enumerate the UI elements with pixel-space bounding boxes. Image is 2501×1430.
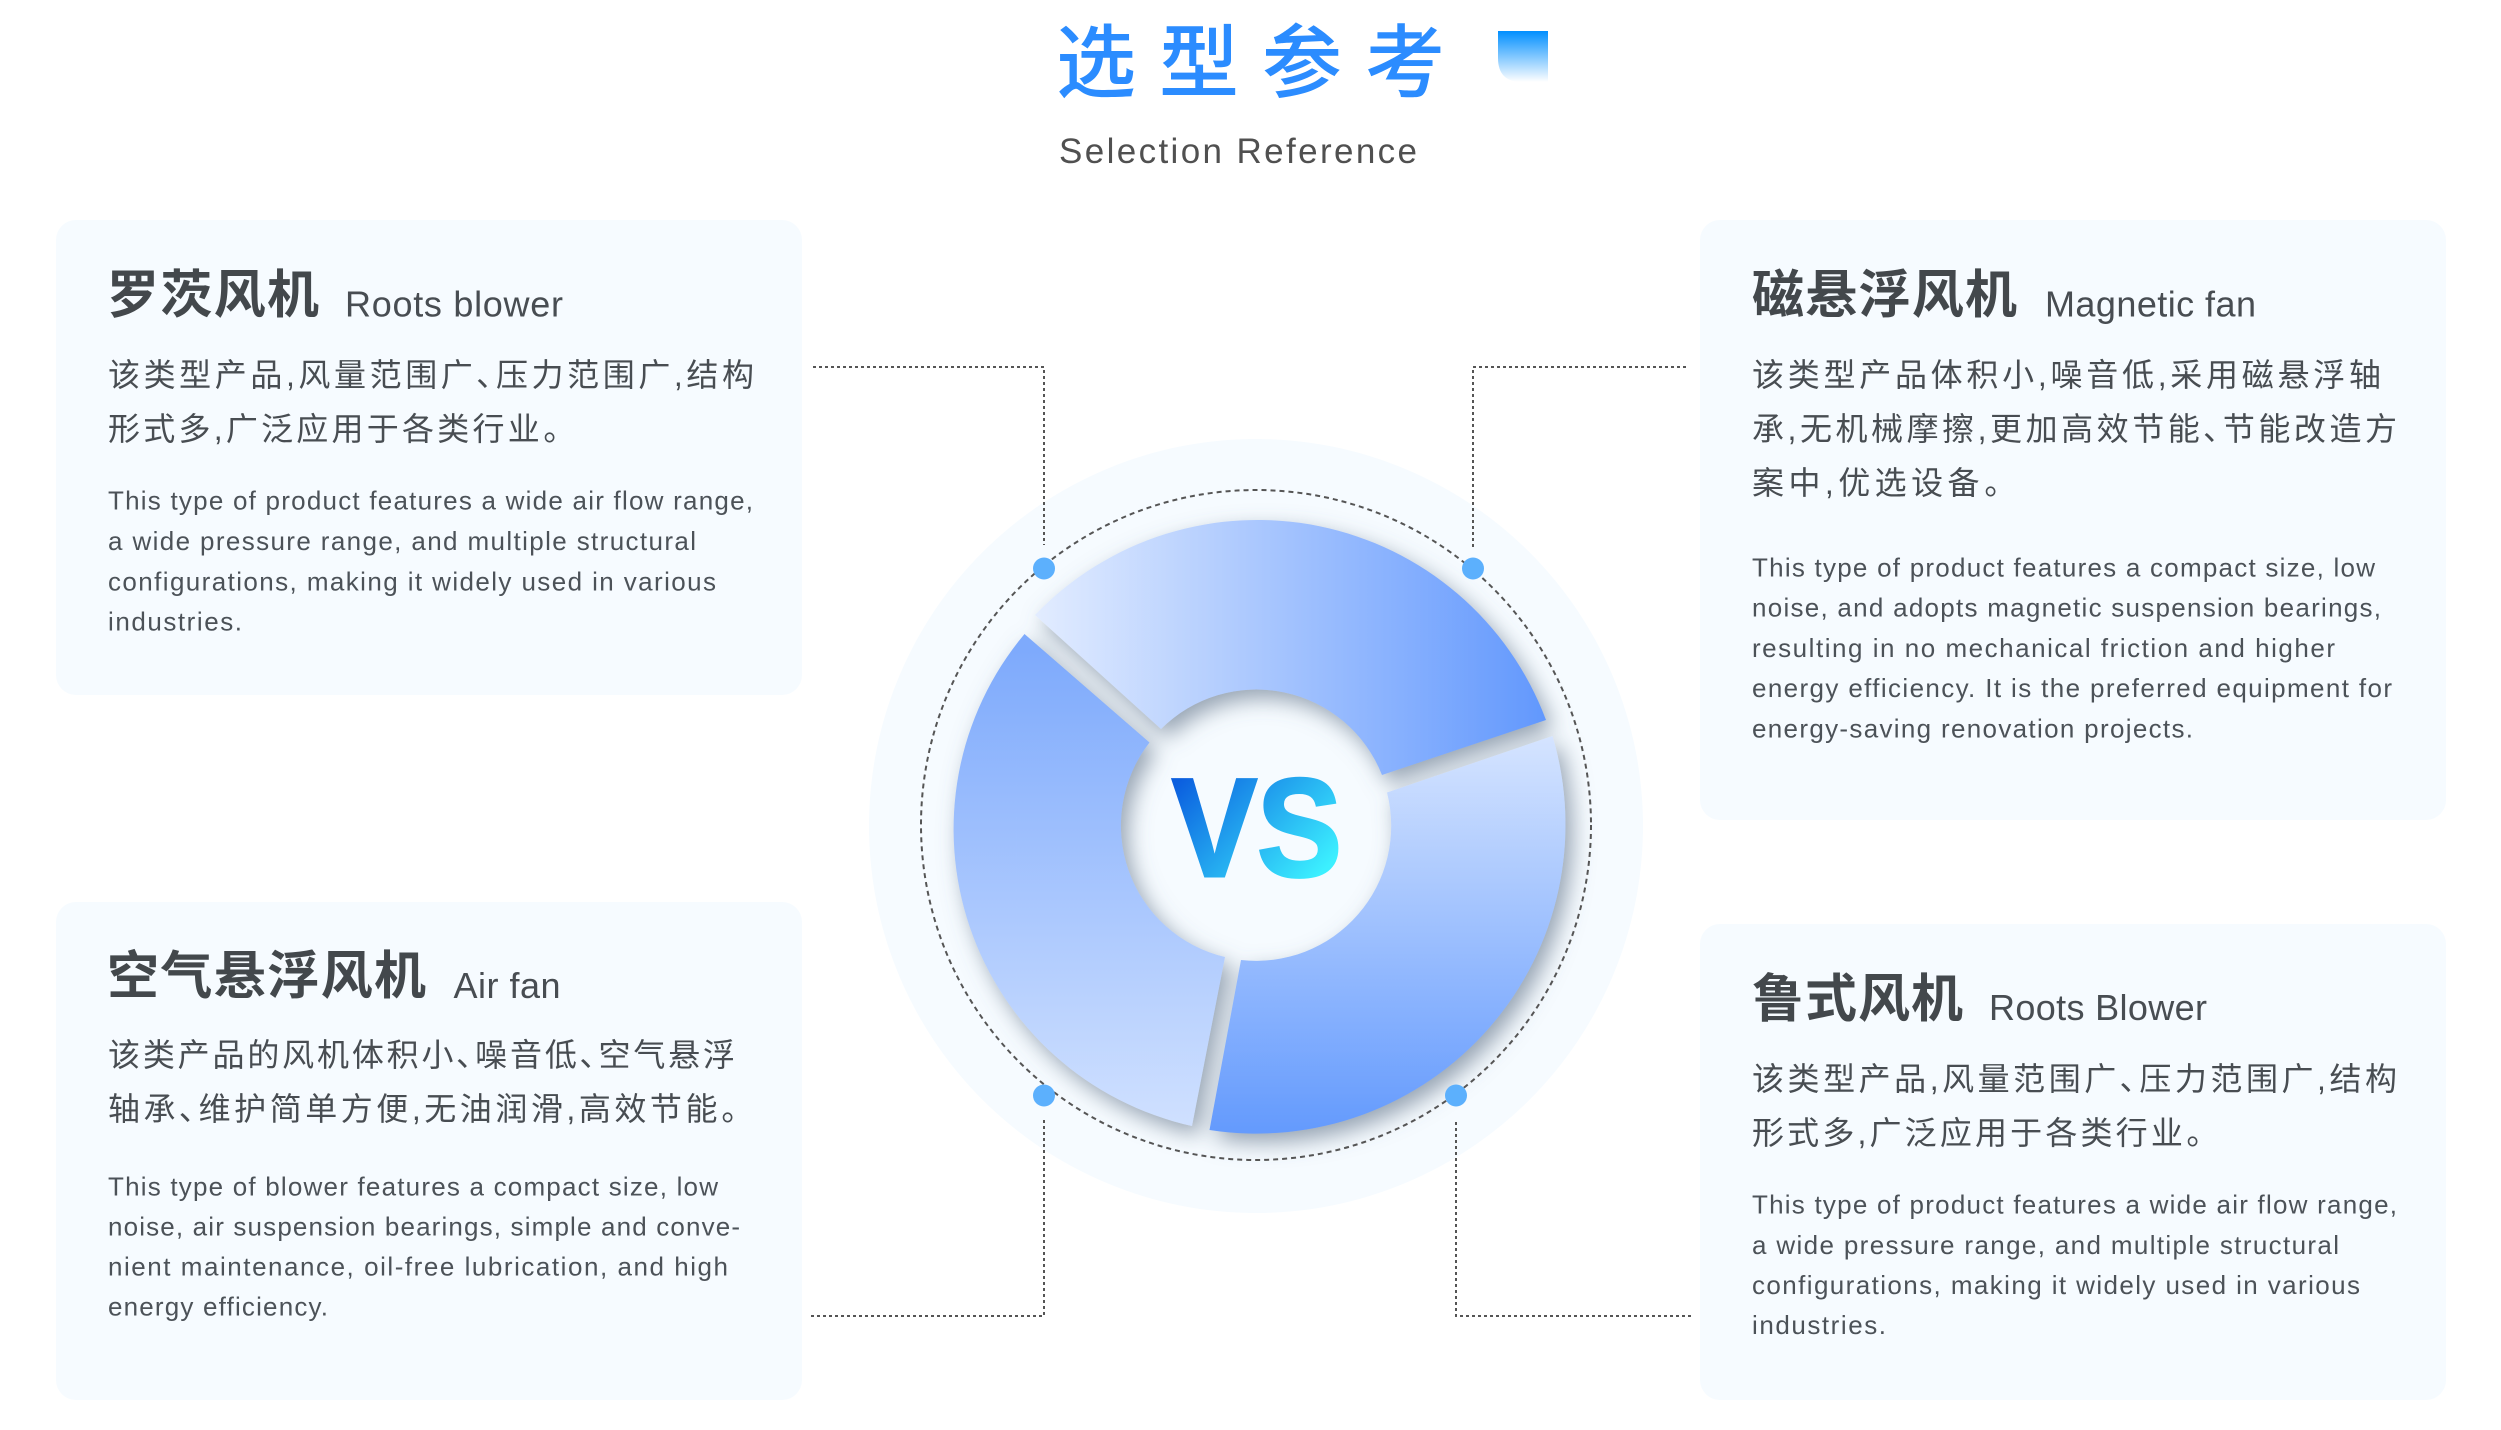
- panel: Roots blower: [56, 220, 802, 695]
- heading: 鲁式风机: [1752, 971, 1963, 1029]
- connector lines: [811, 367, 1691, 1316]
- english description: nient maintenance, oil-free lubrication, and high: [108, 1252, 728, 1282]
- panel background: [56, 220, 802, 695]
- english description: [1752, 552, 2392, 744]
- chinese description: [1752, 357, 2397, 501]
- chinese description: [108, 1037, 737, 1127]
- segment: left: [954, 634, 1225, 1126]
- segment: top: [1035, 520, 1546, 775]
- chinese description: 该类产品的风机体积小、噪音低、空气悬浮: [108, 1037, 735, 1073]
- english description: resulting in no mechanical friction and higher: [1752, 633, 2335, 663]
- english description: a wide pressure range, and multiple structural: [1752, 1230, 2339, 1260]
- english description: energy efficiency. It is the preferred equipment for: [1752, 673, 2392, 703]
- panel: Roots Blower: [1700, 924, 2446, 1400]
- english description: [108, 486, 753, 636]
- chinese description: 承,无机械摩擦,更加高效节能、节能改造方: [1752, 411, 2397, 447]
- pie segments: [954, 520, 1565, 1134]
- heading: 磁悬浮风机: [1752, 267, 2017, 325]
- dashed ring: [921, 490, 1591, 1160]
- english description: This type of product features a wide air flow range,: [108, 486, 753, 516]
- heading: [107, 267, 563, 325]
- segment: right: [1210, 736, 1565, 1134]
- english description: energy-saving renovation projects.: [1752, 714, 2193, 744]
- panel: Air fan: [56, 902, 802, 1400]
- chinese description: 该类型产品体积小,噪音低,采用磁悬浮轴: [1752, 357, 2381, 393]
- english description: [1752, 1190, 2397, 1340]
- title: 选型参考: [1056, 19, 1445, 108]
- heading: Air fan: [454, 965, 560, 1006]
- english description: This type of product features a compact size, low: [1752, 552, 2375, 582]
- panel background: [56, 902, 802, 1400]
- chinese description: 该类型产品,风量范围广、压力范围广,结构: [1752, 1061, 2397, 1097]
- VS label: VS: [1172, 749, 1342, 906]
- english description: noise, and adopts magnetic suspension bearings,: [1752, 592, 2381, 622]
- heading: [1752, 267, 2256, 325]
- diagram: VS pie: [921, 490, 1591, 1160]
- chinese description: 轴承、维护简单方便,无油润滑,高效节能。: [108, 1091, 737, 1127]
- english description: configurations, making it widely used in various: [108, 566, 716, 596]
- heading: 罗茨风机: [107, 267, 319, 325]
- heading: Roots Blower: [1989, 987, 2207, 1028]
- english description: energy efficiency.: [108, 1292, 328, 1322]
- english description: This type of blower features a compact size, low: [108, 1172, 718, 1202]
- subtitle: Selection Reference: [1059, 132, 1417, 171]
- panel background: [1700, 924, 2446, 1400]
- panel background: [1700, 220, 2446, 820]
- icon: gradient corner block: [1498, 31, 1548, 82]
- chinese description: [1752, 1061, 2397, 1151]
- heading: Magnetic fan: [2045, 284, 2256, 324]
- chinese description: 形式多,广泛应用于各类行业。: [108, 411, 559, 447]
- english description: [108, 1172, 740, 1322]
- chinese description: 案中,优选设备。: [1752, 465, 2000, 501]
- english description: This type of product features a wide air flow range,: [1752, 1190, 2397, 1220]
- heading: Roots blower: [345, 284, 563, 324]
- panel: Magnetic fan: [1700, 220, 2446, 820]
- chinese description: 该类型产品,风量范围广、压力范围广,结构: [108, 357, 754, 393]
- connection dots: [1033, 558, 1484, 1106]
- english description: industries.: [108, 606, 242, 636]
- heading: 空气悬浮风机: [107, 948, 426, 1006]
- english description: industries.: [1752, 1310, 1886, 1340]
- chinese description: 形式多,广泛应用于各类行业。: [1752, 1115, 2202, 1151]
- heading: [1752, 971, 2207, 1029]
- hub circle: [1121, 690, 1391, 960]
- english description: a wide pressure range, and multiple structural: [108, 526, 696, 556]
- chinese description: [108, 357, 754, 447]
- english description: noise, air suspension bearings, simple and conve-: [108, 1212, 740, 1242]
- pale backdrop circle: [869, 439, 1643, 1213]
- english description: configurations, making it widely used in various: [1752, 1270, 2360, 1300]
